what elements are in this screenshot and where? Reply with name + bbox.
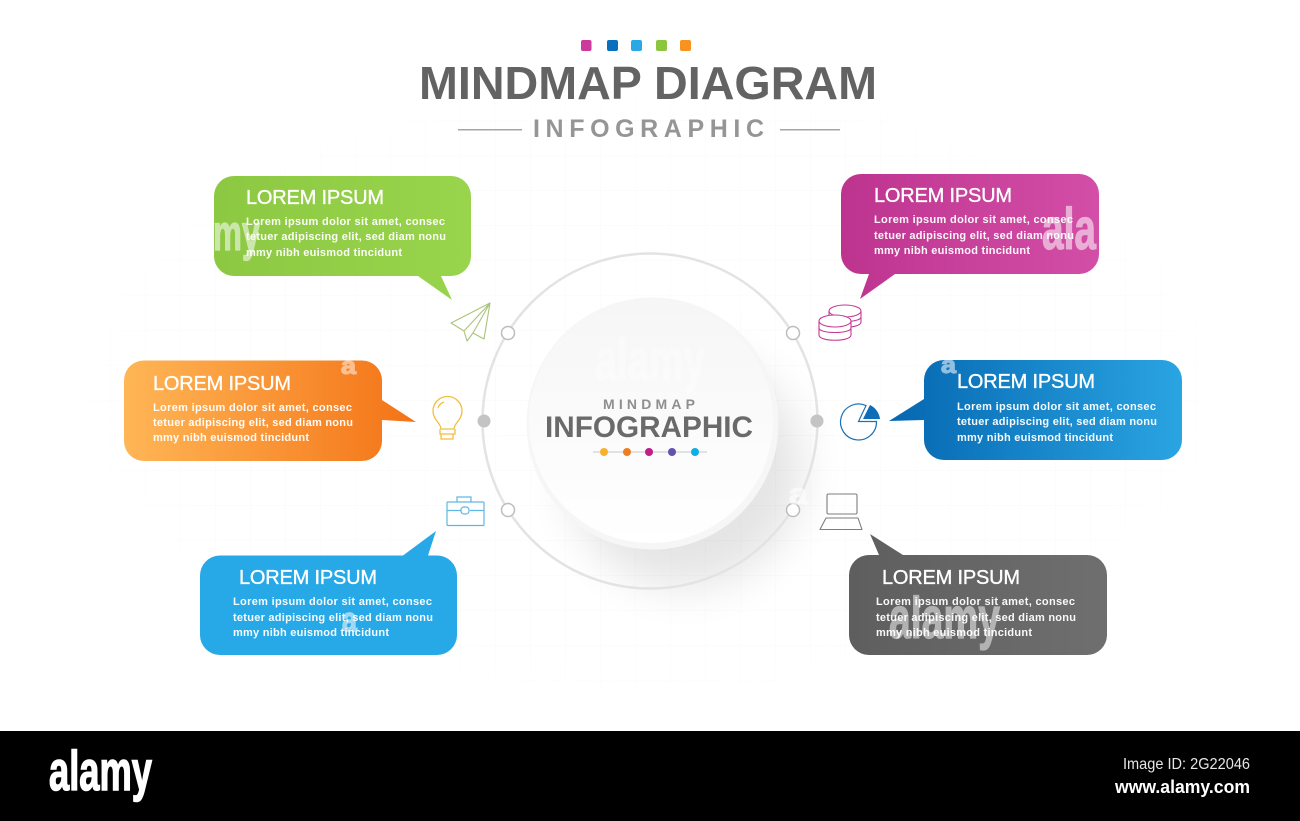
title: MINDMAP DIAGRAM — [419, 57, 877, 109]
panel: green top left — [213, 176, 471, 300]
icon: pie chart — [841, 404, 880, 440]
panel: grey bottom right — [849, 534, 1107, 655]
footer url: www.alamy.com — [1114, 777, 1250, 797]
panel: light blue bottom left: a — [342, 601, 358, 639]
panel: blue middle right: LOREM IPSUM — [957, 371, 1095, 393]
icon: coins — [819, 305, 861, 340]
panel: blue middle right: mmy nibh euismod tincidunt — [957, 432, 1113, 444]
panel: magenta top right: tetuer adipiscing elit, sed diam nonu — [874, 230, 1074, 242]
panel: orange middle left: tetuer adipiscing elit, sed diam nonu — [153, 417, 353, 429]
icon: laptop — [820, 494, 862, 530]
panel: grey bottom right: mmy nibh euismod tincidunt — [876, 627, 1032, 639]
image id: Image ID: 2G22046 — [1123, 756, 1250, 773]
central disc drop shadow — [567, 352, 803, 588]
subtitle with rules: INFOGRAPHIC — [533, 115, 764, 143]
panel: light blue bottom left: LOREM IPSUM — [239, 567, 377, 589]
panel: magenta top right: LOREM IPSUM — [874, 185, 1012, 207]
panel: grey bottom right: alamy — [889, 586, 1000, 651]
panel: blue middle right: a — [941, 352, 957, 379]
panel: light blue bottom left: Lorem ipsum dolor sit amet, consec — [233, 596, 432, 608]
icon: toolbox — [447, 497, 484, 526]
footer logo: alamy — [49, 739, 152, 802]
panel: orange middle left: a — [341, 353, 357, 380]
panel: magenta top right: mmy nibh euismod tincidunt — [874, 245, 1030, 257]
icon: paper plane — [451, 303, 490, 341]
panel: magenta top right: Lorem ipsum dolor sit amet, consec — [874, 214, 1073, 226]
panel: grey bottom right: tetuer adipiscing elit, sed diam nonu — [876, 612, 1076, 624]
disc label — [545, 396, 753, 444]
footer bar — [0, 731, 1300, 821]
panel: light blue bottom left — [200, 531, 457, 655]
panel: magenta top right — [841, 174, 1099, 299]
panel: green top left: LOREM IPSUM — [246, 187, 384, 209]
panel: blue middle right — [889, 352, 1182, 460]
disc label: MINDMAP — [603, 396, 695, 412]
icon: light bulb — [433, 396, 462, 439]
top colour squares — [581, 40, 691, 51]
panel: orange middle left — [124, 353, 416, 461]
panel: blue middle right: Lorem ipsum dolor sit amet, consec — [957, 401, 1156, 413]
small watermark near ring: a — [789, 478, 807, 511]
panel: grey bottom right: Lorem ipsum dolor sit amet, consec — [876, 596, 1075, 608]
panel: light blue bottom left: tetuer adipiscing elit, sed diam nonu — [233, 612, 433, 624]
panel: orange middle left: mmy nibh euismod tincidunt — [153, 432, 309, 444]
disc colour dots — [593, 448, 707, 456]
panel: green top left: tetuer adipiscing elit, sed diam nonu — [246, 231, 446, 243]
panel: green top left: my — [213, 205, 260, 261]
central disc — [526, 298, 778, 550]
disc label: INFOGRAPHIC — [545, 411, 753, 444]
panel: orange middle left: LOREM IPSUM — [153, 373, 291, 395]
panel: grey bottom right: LOREM IPSUM — [882, 567, 1020, 589]
connector dots — [478, 326, 824, 516]
panel: green top left: Lorem ipsum dolor sit amet, consec — [246, 216, 445, 228]
central disc: alamy — [595, 328, 705, 393]
panel: orange middle left: Lorem ipsum dolor sit amet, consec — [153, 402, 352, 414]
outer ring — [482, 254, 818, 588]
panel: blue middle right: tetuer adipiscing elit, sed diam nonu — [957, 416, 1157, 428]
panel: magenta top right: ala — [1042, 197, 1096, 262]
panel: light blue bottom left: mmy nibh euismod tincidunt — [233, 627, 389, 639]
panel: green top left: mmy nibh euismod tincidunt — [246, 247, 402, 259]
